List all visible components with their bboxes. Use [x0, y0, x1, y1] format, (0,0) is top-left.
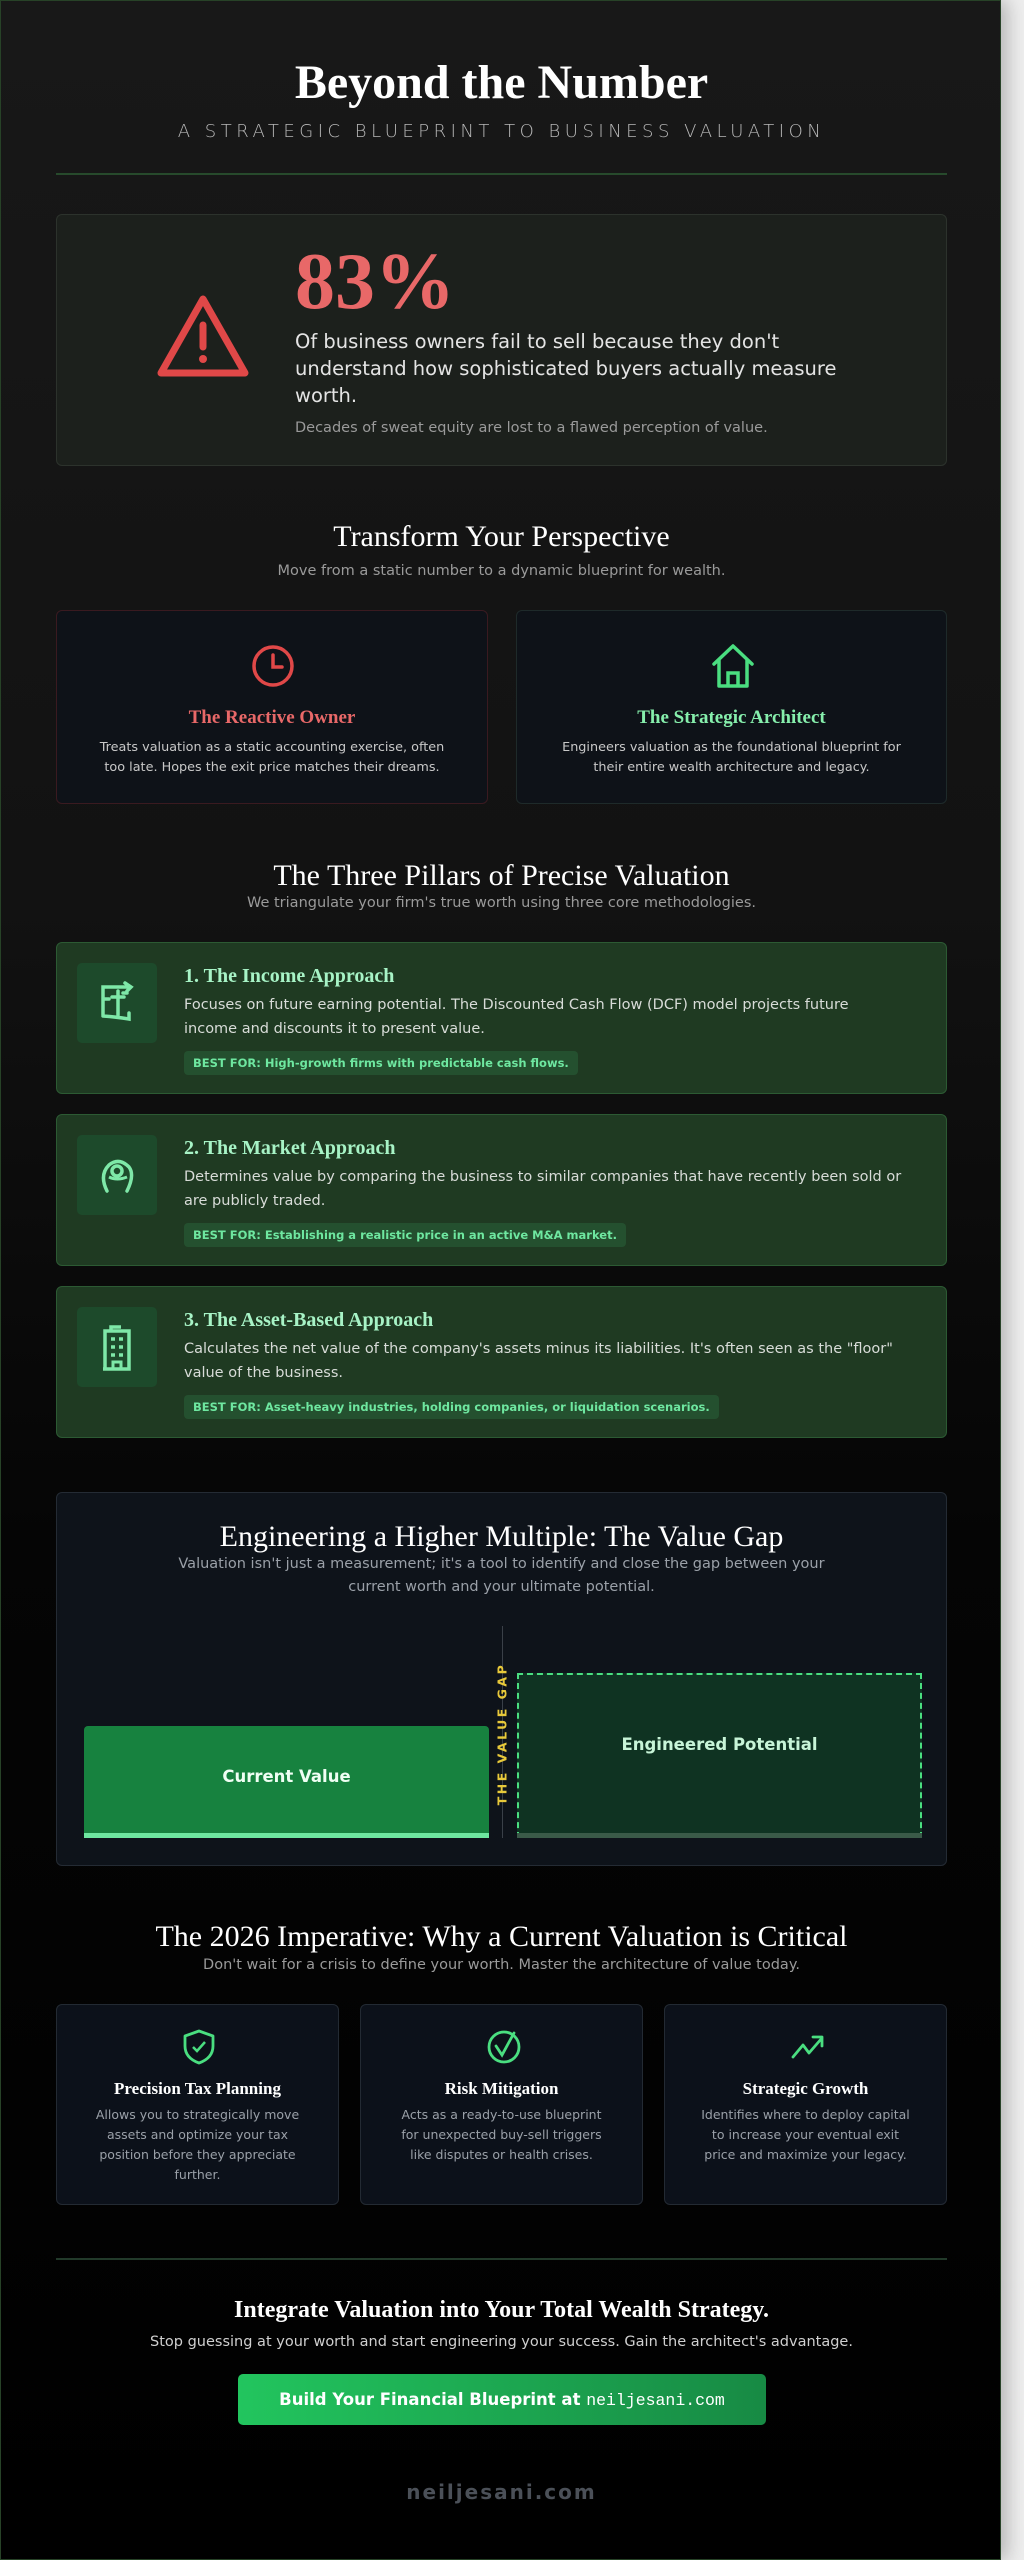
card: strategic growth: Strategic Growth — [743, 2079, 868, 2098]
heading: Engineering a Higher Multiple: The Value Gap — [220, 1520, 783, 1553]
bar: engineered potential: Engineered Potential — [621, 1735, 818, 1754]
icon: trend — [792, 2036, 824, 2058]
pillar 1 — [56, 942, 947, 1094]
heading: Transform: Transform Your Perspective — [333, 520, 670, 553]
heading: 2026 imperative: The 2026 Imperative: Why a Current Valuation is Critical — [155, 1920, 848, 1953]
icon: clock — [252, 645, 294, 687]
description: Determines value by comparing the business to similar companies that have recently been sold or are publicly traded. — [184, 1169, 901, 1209]
icon: house — [712, 644, 754, 688]
title: The Reactive Owner — [189, 707, 355, 728]
panel: strategic architect — [516, 610, 947, 804]
icon: building — [77, 1307, 157, 1387]
title: The Strategic Architect — [637, 707, 826, 728]
badge: BEST FOR: High-growth firms with predictable cash flows. — [193, 1056, 569, 1070]
CTA text: Stop guessing at your worth and start engineering your success. Gain the architect's advantage. — [150, 2334, 853, 2350]
card: tax planning: Allows you to strategically move assets and optimize your tax position before they appreciate further. — [96, 2107, 299, 2182]
panel: reactive owner — [56, 610, 488, 804]
heading: three pillars: The Three Pillars of Precise Valuation — [273, 859, 730, 892]
card: tax planning — [56, 2004, 339, 2205]
pillar 3 — [56, 1286, 947, 1438]
panel: value gap — [56, 1492, 947, 1866]
stat text: Of business owners fail to sell because they don't understand how sophisticated buyers actually measure worth. — [295, 330, 836, 407]
pillar 2 — [56, 1114, 947, 1266]
panel: 83% stat — [56, 214, 947, 466]
subheading: We triangulate your firm's true worth using three core methodologies. — [247, 895, 756, 911]
CTA button: Build Your Financial Blueprint at neiljesani.com — [279, 2390, 725, 2410]
text: Treats valuation as a static accounting exercise, often too late. Hopes the exit price matches their dreams. — [100, 740, 444, 775]
card: tax planning: Precision Tax Planning — [114, 2079, 281, 2098]
card: strategic growth: Identifies where to deploy capital to increase your eventual exit price and maximize your legacy. — [701, 2107, 910, 2162]
card: risk mitigation — [360, 2004, 643, 2205]
CTA heading: Integrate Valuation into Your Total Wealth Strategy. — [234, 2297, 769, 2323]
bar: engineered potential — [517, 1673, 922, 1838]
title: 1. The Income Approach — [184, 965, 394, 987]
icon: check circle — [488, 2030, 520, 2064]
chart: value gap bars — [84, 1626, 922, 1838]
description: Valuation isn't just a measurement; it's a tool to identify and close the gap between your current worth and your ultimate potential. — [178, 1556, 825, 1595]
icon: market — [77, 1135, 157, 1215]
title: 3. The Asset-Based Approach — [184, 1309, 433, 1331]
text: Engineers valuation as the foundational blueprint for their entire wealth architecture and legacy. — [562, 740, 901, 775]
subheading: Don't wait for a crisis to define your worth. Master the architecture of value today. — [203, 1957, 800, 1973]
icon: shield — [184, 2030, 214, 2064]
badge — [184, 1395, 719, 1419]
bar: current value — [84, 1726, 489, 1838]
badge: BEST FOR: Establishing a realistic price in an active M&A market. — [193, 1228, 617, 1242]
CTA button — [238, 2374, 766, 2425]
footer: neiljesani.com — [406, 2480, 597, 2504]
label: the value gap: THE VALUE GAP — [494, 1663, 510, 1805]
badge — [184, 1051, 578, 1075]
description: Calculates the net value of the company's assets minus its liabilities. It's often seen as the "floor" value of the business. — [184, 1341, 893, 1381]
description: Focuses on future earning potential. The Discounted Cash Flow (DCF) model projects future income and discounts it to present value. — [184, 997, 849, 1037]
card: risk mitigation: Risk Mitigation — [445, 2079, 558, 2098]
badge — [184, 1223, 626, 1247]
stat subtext: Decades of sweat equity are lost to a flawed perception of value. — [295, 420, 768, 436]
card: risk mitigation: Acts as a ready-to-use blueprint for unexpected buy-sell triggers like disputes or health crises. — [401, 2107, 602, 2162]
title: 2. The Market Approach — [184, 1137, 396, 1159]
subtitle: A STRATEGIC BLUEPRINT TO BUSINESS VALUATION — [178, 121, 825, 142]
bar: current value: Current Value — [222, 1767, 351, 1786]
icon: income — [77, 963, 157, 1043]
subheading: Move from a static number to a dynamic blueprint for wealth. — [278, 563, 725, 579]
badge: BEST FOR: Asset-heavy industries, holding companies, or liquidation scenarios. — [193, 1400, 710, 1414]
icon: warning triangle — [158, 296, 248, 376]
card: strategic growth — [664, 2004, 947, 2205]
big number: 83% — [295, 238, 455, 326]
title: Beyond the Number — [295, 56, 708, 109]
